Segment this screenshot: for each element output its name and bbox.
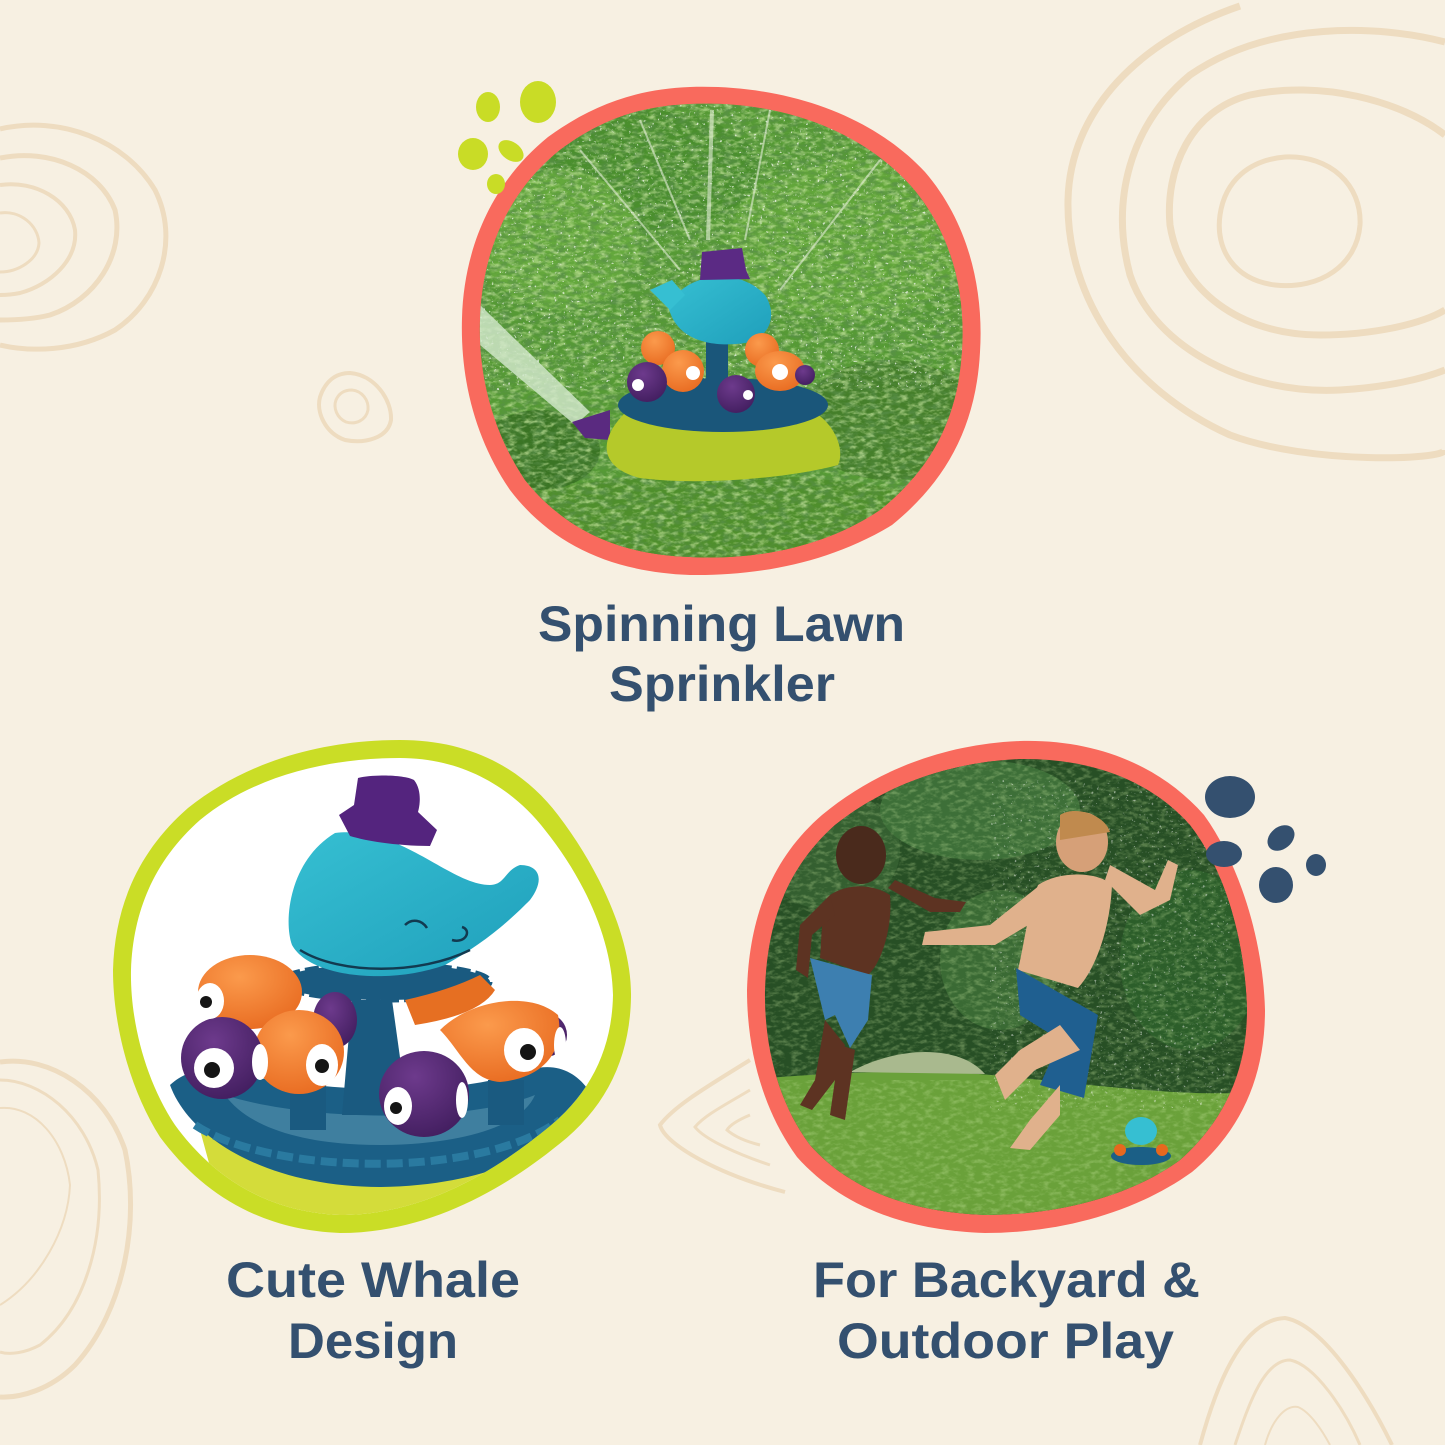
- fish: [641, 331, 675, 365]
- heading: cute whale design: Cute Whale: [226, 1252, 520, 1308]
- whale: [668, 277, 771, 344]
- blue tray: [170, 1067, 587, 1187]
- decorative small ring: [319, 373, 391, 441]
- heading: spinning lawn sprinkler: Sprinkler: [609, 656, 835, 712]
- purple fish: [181, 1017, 263, 1099]
- decorative contour rings: top left: [0, 125, 166, 349]
- decorative contour rings: top right: [1068, 6, 1445, 458]
- heading: spinning lawn sprinkler: [538, 596, 905, 712]
- tiny sprinkler toy: [1111, 1117, 1171, 1165]
- eyes: [194, 983, 566, 1125]
- orange fish: [198, 955, 302, 1029]
- heading: backyard and outdoor play: [813, 1252, 1200, 1369]
- lime base: [200, 1133, 530, 1215]
- back fish: [405, 975, 495, 1025]
- decorative contour rings: bottom right: [1200, 1318, 1392, 1445]
- heading: spinning lawn sprinkler: Spinning Lawn: [538, 596, 905, 652]
- whale body: [289, 832, 539, 976]
- photo: whale sprinkler on grass: [480, 104, 963, 558]
- photo: whale toy close-up: [130, 758, 613, 1215]
- heading: backyard and outdoor play: For Backyard &: [813, 1252, 1200, 1308]
- icon: navy dots: [1205, 776, 1326, 903]
- lime frame: [113, 740, 631, 1233]
- lime base: [607, 410, 840, 481]
- decorative contour rings: bottom left: [0, 1061, 131, 1397]
- heading: cute whale design: Design: [288, 1313, 458, 1369]
- photo: children playing in sprinkler: [764, 759, 1247, 1215]
- stem: [342, 1000, 400, 1115]
- hat: [339, 776, 437, 846]
- right child: [922, 811, 1178, 1150]
- whale smile: [300, 921, 470, 969]
- left child: [796, 826, 966, 1120]
- panel: cute whale design: [110, 740, 640, 1240]
- coral frame: [462, 87, 981, 575]
- panel: spinning lawn sprinkler: [460, 87, 981, 575]
- blue plate: [280, 964, 490, 1000]
- decorative triangle rings: [660, 1060, 785, 1192]
- blue tray: [618, 378, 828, 432]
- coral frame: [747, 741, 1265, 1233]
- panel: backyard play: [745, 740, 1270, 1240]
- hat: [700, 248, 750, 280]
- icon: lime dots: [458, 81, 556, 194]
- heading: cute whale design: [226, 1252, 520, 1369]
- heading: backyard and outdoor play: Outdoor Play: [837, 1313, 1174, 1369]
